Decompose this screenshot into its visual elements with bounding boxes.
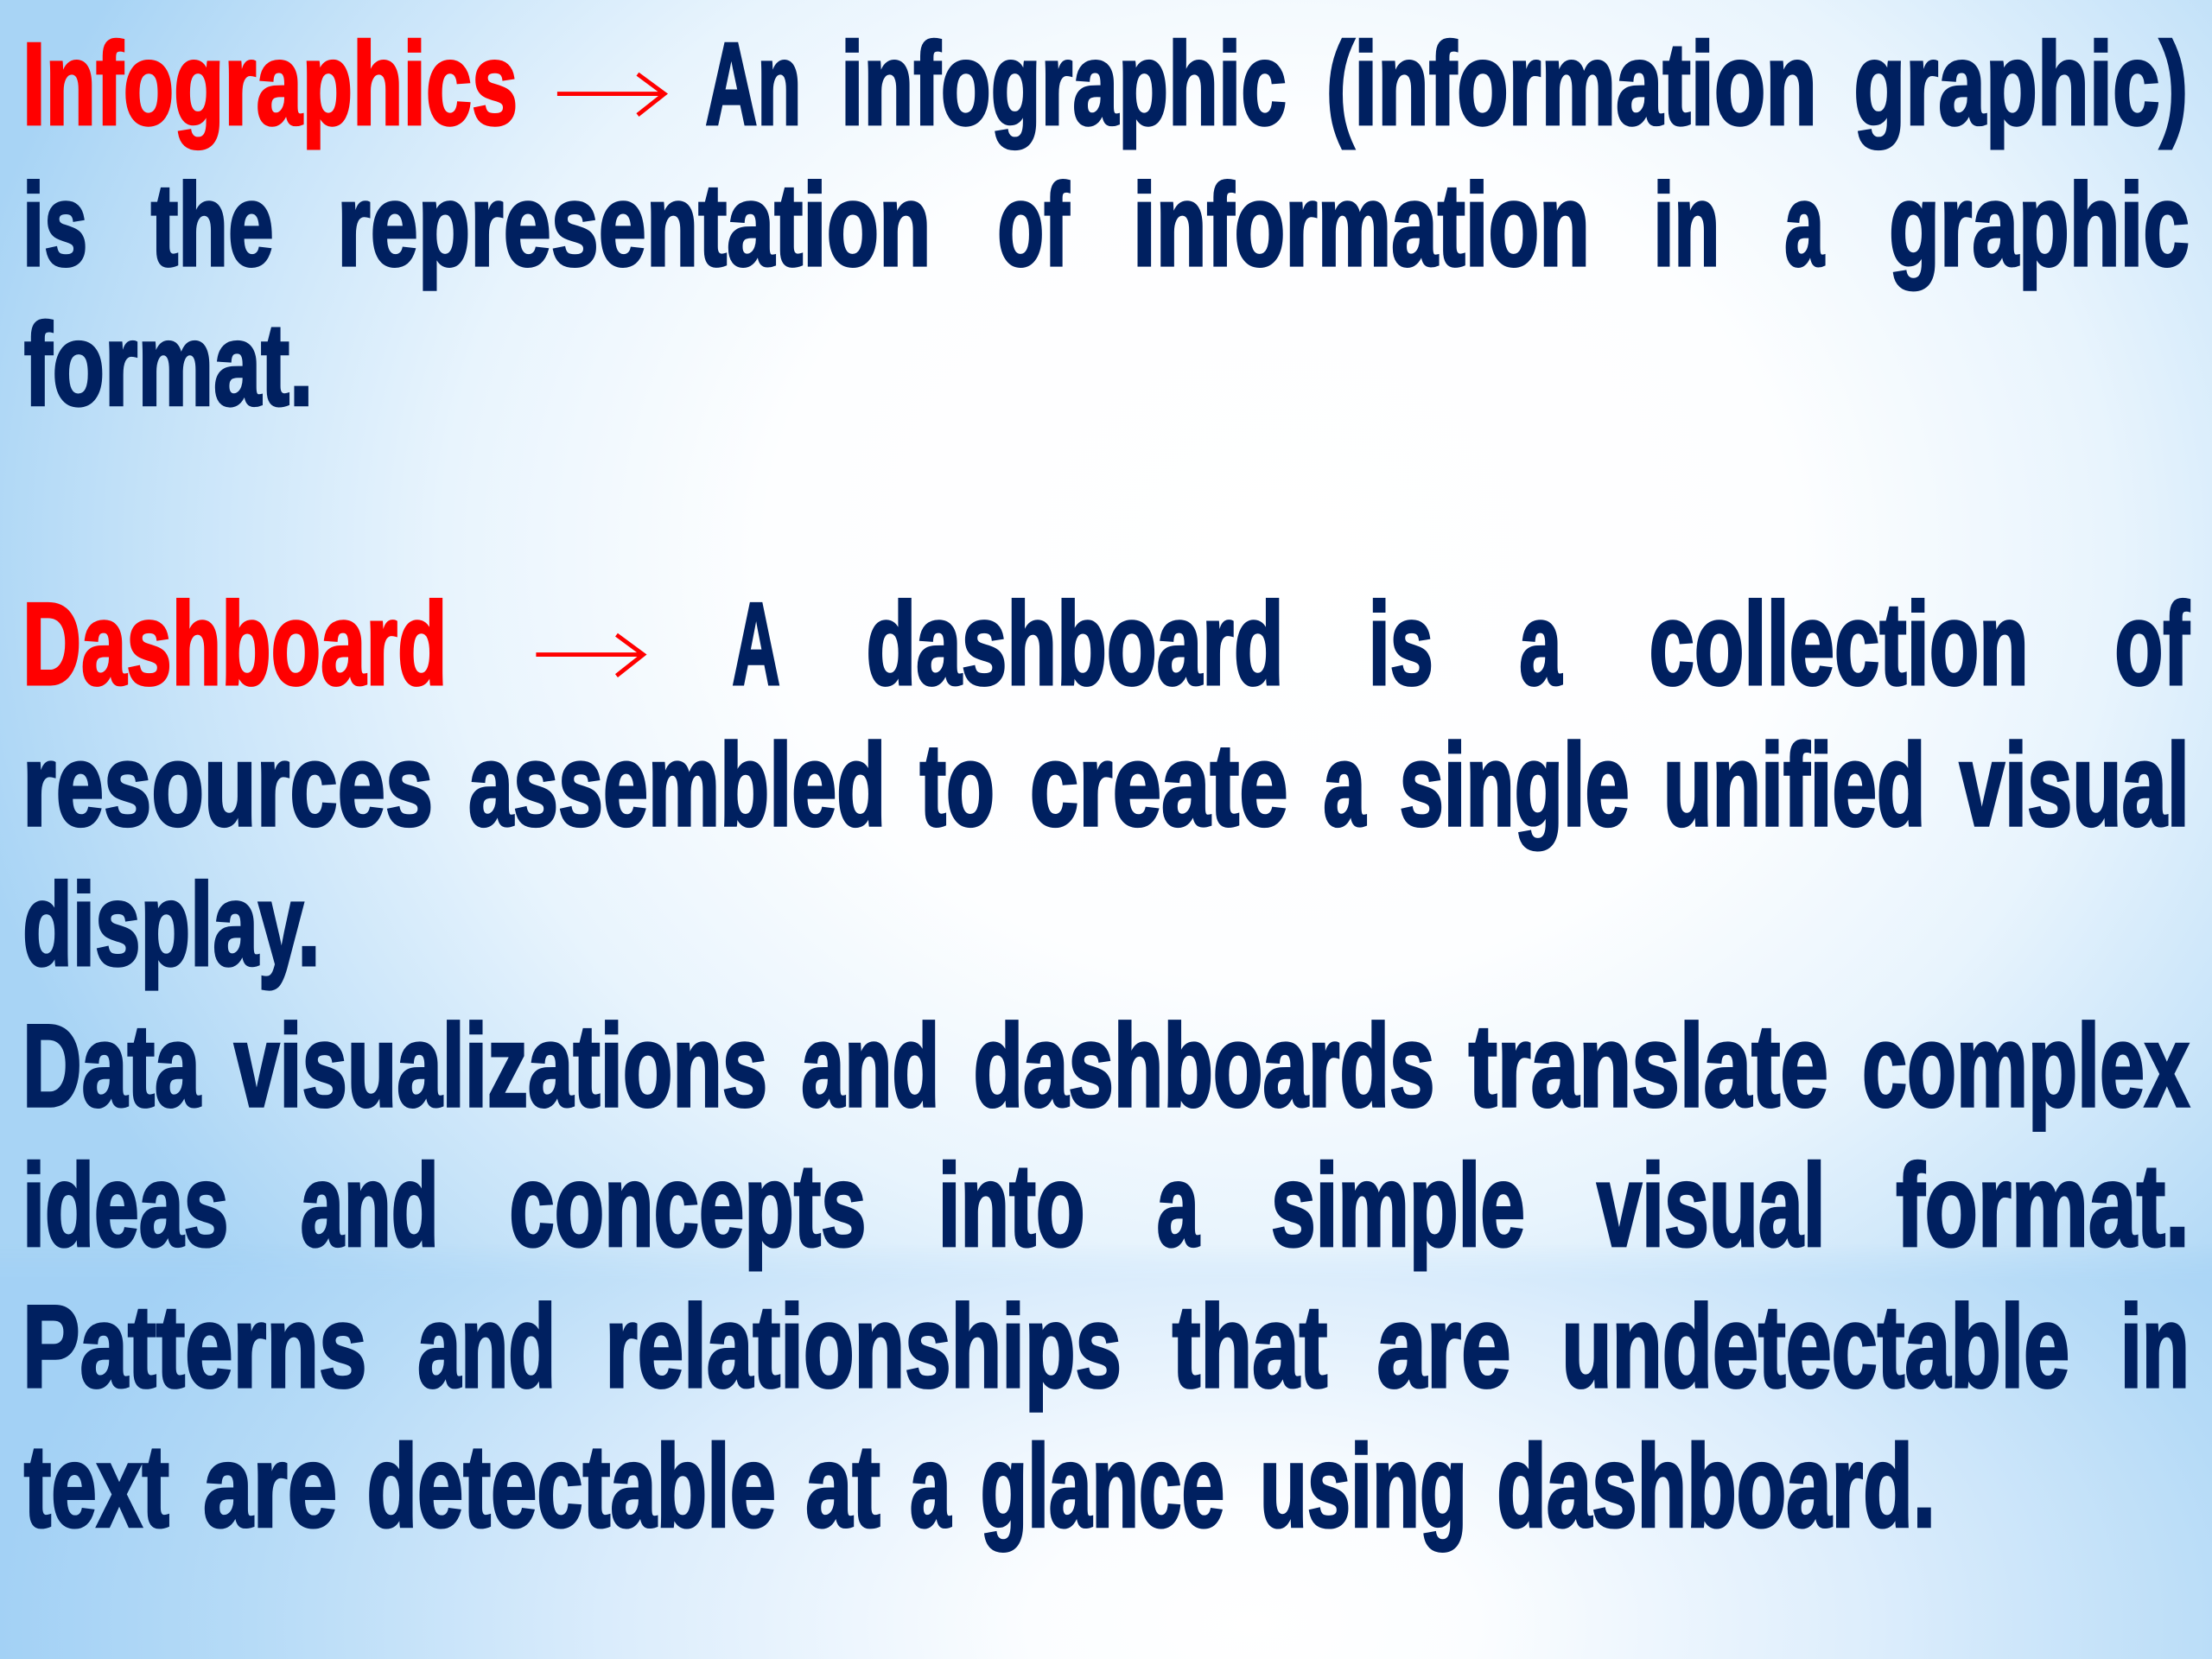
explanation line 3 xyxy=(22,1281,2190,1412)
explanation line 1: Data xyxy=(22,1000,201,1131)
explanation line 2: visual xyxy=(1597,1140,1826,1271)
explanation line 4: a xyxy=(910,1421,951,1552)
explanation line 2: simple xyxy=(1271,1140,1525,1271)
definition line 2: information xyxy=(1133,159,1590,290)
dashboard line 1: is xyxy=(1369,578,1433,709)
dashboard line 2: to xyxy=(919,719,995,850)
explanation line 2: ideas xyxy=(22,1140,228,1271)
explanation line 4 xyxy=(24,1421,1936,1552)
dashboard line 1: a xyxy=(1519,578,1562,709)
explanation line 4: text xyxy=(24,1421,169,1552)
definition line 2: the xyxy=(151,159,274,290)
dashboard line 1: A xyxy=(732,578,780,709)
paragraph: infographics definition xyxy=(22,18,2190,430)
dashboard line 2: assembled xyxy=(468,719,886,850)
definition line 2: representation xyxy=(337,159,931,290)
arrow: infographics xyxy=(557,74,664,115)
dashboard line 2: unified xyxy=(1663,719,1926,850)
dashboard line 2 xyxy=(22,719,2190,850)
definition line 1: infographic xyxy=(841,18,1287,149)
arrow: dashboard xyxy=(536,635,643,676)
explanation line 1 xyxy=(22,1000,2190,1131)
definition line 2: in xyxy=(1653,159,1719,290)
definition line 1 xyxy=(705,18,2188,149)
explanation line 3: that xyxy=(1173,1281,1327,1412)
dashboard line 2: resources xyxy=(22,719,433,850)
explanation line 4: detectable xyxy=(366,1421,776,1552)
dashboard line 2: create xyxy=(1030,719,1288,850)
explanation line 3: are xyxy=(1376,1281,1511,1412)
dashboard line 1 xyxy=(732,578,2190,709)
explanation line 2: a xyxy=(1157,1140,1200,1271)
explanation line 2: concepts xyxy=(509,1140,866,1271)
explanation line 3: and xyxy=(417,1281,556,1412)
explanation line 1: dashboards xyxy=(974,1000,1434,1131)
heading term: Infographics: Infographics xyxy=(22,18,518,149)
explanation line 2 xyxy=(22,1140,2190,1271)
explanation line 1: and xyxy=(801,1000,939,1131)
explanation line 1: translate xyxy=(1469,1000,1828,1131)
heading term: Dashboard: Dashboard xyxy=(22,578,448,709)
explanation line 4: at xyxy=(805,1421,880,1552)
definition line 2: a xyxy=(1784,159,1825,290)
definition line 1: (information xyxy=(1326,18,1817,149)
dashboard line 1: dashboard xyxy=(866,578,1284,709)
dashboard line 3: display. xyxy=(22,859,321,990)
explanation line 4: using xyxy=(1260,1421,1467,1552)
explanation line 3: relationships xyxy=(605,1281,1122,1412)
explanation line 2: into xyxy=(938,1140,1085,1271)
paragraph: data visualizations explanation xyxy=(22,1000,2190,1552)
explanation line 4: dashboard. xyxy=(1497,1421,1936,1552)
dashboard line 2: a xyxy=(1323,719,1366,850)
explanation line 1: visualizations xyxy=(234,1000,767,1131)
definition line 2: is xyxy=(22,159,87,290)
dashboard line 2: single xyxy=(1400,719,1630,850)
definition line 3: format. xyxy=(24,299,313,430)
explanation line 4: glance xyxy=(981,1421,1224,1552)
definition line 2: of xyxy=(997,159,1070,290)
explanation line 2: and xyxy=(301,1140,439,1271)
explanation line 4: are xyxy=(203,1421,337,1552)
definition line 2 xyxy=(22,159,2190,290)
dashboard line 1: collection xyxy=(1649,578,2029,709)
paragraph: dashboard definition xyxy=(22,578,2190,990)
explanation line 3: Patterns xyxy=(22,1281,366,1412)
definition line 1: An xyxy=(705,18,801,149)
